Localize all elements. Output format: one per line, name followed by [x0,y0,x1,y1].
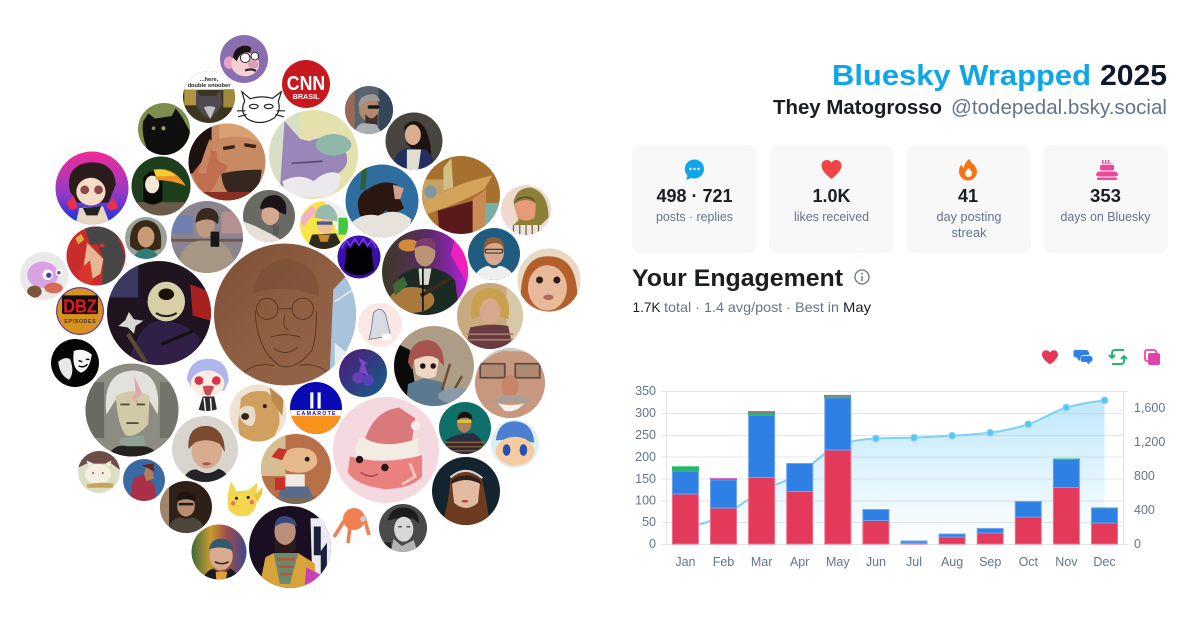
avatar: line drawing cat [237,92,285,123]
avatar: black cat [138,103,190,155]
avatar: older man with mustache and glasses [475,348,545,418]
avatar: man in beanie with rainbow wall [192,524,246,580]
avatar: CNN Brasil logo: BRASIL [293,92,320,101]
stacked bars: quotes [710,395,851,480]
avatar: black and white portrait with hands [379,504,427,552]
icon: replies bubbles [1074,350,1092,364]
avatar: singer with guitar [382,229,468,315]
right axis labels: 400 [1134,503,1155,517]
month labels: Nov [1055,555,1078,569]
month labels: Oct [1019,555,1039,569]
month labels: Feb [713,555,734,569]
right axis labels: 1,200 [1134,435,1165,449]
icon: birthday cake [1096,160,1118,180]
avatar: toucan [132,156,190,216]
avatar: anime pilot on pride flag [300,201,348,249]
avatar: chibi with blue helmet [491,420,539,468]
avatar: long blonde hair in motion [422,156,500,234]
avatar: man with yellow glasses on teal [439,402,491,454]
avatar: smiling curly woman [125,217,167,259]
avatar: bearded man with hand [188,124,266,202]
left axis labels [635,384,656,551]
avatar: orange robot [334,508,369,543]
stat value: 498 · 721 [656,186,732,206]
title: Bluesky Wrapped [832,60,1091,92]
left axis labels: 300 [635,406,656,420]
stat label: days on Bluesky [1060,210,1151,224]
avatar: white cat illustration [78,451,120,493]
panel: posts and replies [632,145,757,253]
display name and handle [773,97,1167,119]
right axis labels [1134,401,1165,551]
left axis labels: 100 [635,494,656,508]
avatar: Jack Skellington figure [107,261,211,365]
cumulative points [872,397,1108,442]
avatar: purple cherries [339,349,387,397]
month labels [675,555,1116,569]
avatar: DBZ episodes logo [56,287,104,335]
left axis labels: 150 [635,472,656,486]
avatar: dark haired selfie [243,190,295,242]
stacked bars: replies [672,398,1118,543]
right axis labels: 0 [1134,537,1141,551]
avatar: cat meme with caption: double snoober [188,83,231,89]
icon: reposts arrows [1109,350,1127,364]
avatar: golden retriever [230,384,286,442]
stat label: day posting [936,210,1002,224]
stat label: streak [952,226,987,240]
stat label [936,210,1002,240]
avatar: comic drummer [394,326,478,406]
left axis labels: 200 [635,450,656,464]
month labels: Jun [866,555,886,569]
month labels: Dec [1093,555,1116,569]
icon: likes heart [1042,350,1058,364]
avatar: pink pixel slime with Santa hat [333,397,439,503]
icon: quotes squares [1145,350,1160,365]
avatar: CNN Brasil logo [282,60,330,108]
avatar: DBZ episodes logo: EPISODES [64,319,96,325]
left axis labels: 250 [635,428,656,442]
month labels: Apr [790,555,809,569]
avatar: cat meme with caption [183,71,235,123]
avatar: cartoon woman with hijab [501,185,551,236]
stat value: 1.0K [812,186,850,206]
month labels: Aug [941,555,963,569]
avatar: Camarote logo: CAMAROTE [297,411,336,417]
month labels: Jul [906,555,922,569]
left axis labels: 50 [642,515,656,529]
engagement summary: May [843,299,871,315]
avatar: person with curly blonde hair [457,283,523,349]
panel: days on Bluesky [1043,145,1168,253]
avatar: cat meme with caption: ...here, [200,77,219,83]
avatar: pink blob creature [20,252,68,300]
icon: chat bubble [685,159,704,180]
avatar: Camarote logo [290,382,342,434]
avatar: pikachu [228,481,263,516]
stat value: 41 [958,186,978,206]
avatar: man in sunglasses [345,86,393,134]
avatar: man with glasses on blue [468,228,520,280]
avatar: porcelain doll with red hair [518,248,580,312]
display name and handle: They Matogrosso [773,97,942,119]
avatar bubble cluster [20,35,580,588]
avatar: man in glasses with hoodie [160,481,212,533]
section heading: Your Engagement: Your Engagement [632,265,843,292]
left axis labels: 350 [635,384,656,398]
right axis labels: 1,600 [1134,401,1165,415]
month labels: May [826,555,850,569]
avatar: woman in red dress illustration [66,226,126,286]
stat label: posts · replies [656,210,733,224]
left axis labels: 0 [649,537,656,551]
icon: flame [959,159,977,180]
display name and handle: @todepedal.bsky.social [951,97,1167,119]
avatar: anime girl with blue hair [186,358,229,411]
avatar: CNN Brasil logo: CNN [287,73,325,95]
chart legend icons [1042,350,1160,365]
icon: heart [822,160,842,179]
stat label: likes received [794,210,869,224]
avatar: curly haired woman against blue sky [346,164,418,238]
avatar: black and white theatre masks [51,339,99,387]
avatar: mirror selfie man [171,201,243,273]
avatar: smiling woman in blazer [386,112,442,170]
stacked bars: likes [672,450,1118,544]
panel: likes received [769,145,894,253]
chart: monthly engagement stacked bars with cumulative line [635,384,1165,569]
cumulative area [685,400,1104,544]
month labels: Mar [751,555,772,569]
chart gridlines and axes [661,391,1128,544]
month labels: Jan [675,555,696,569]
avatar: soft pink sketch [358,303,402,347]
avatar: Monica comic character [261,434,331,506]
avatar: woman with headband at night [432,457,500,525]
avatar: DBZ episodes logo: DBZ [63,295,97,316]
avatar: red coated man on blue [123,459,165,501]
month labels: Sep [979,555,1001,569]
avatar: purple outlined dark figure [338,236,380,278]
avatar: large wood burned portrait [214,244,360,389]
avatar: Bowie style watercolor portrait [86,364,178,459]
avatar: purple cartoon with glasses [220,35,268,83]
right axis labels: 800 [1134,469,1155,483]
avatar: purple dragon illustration [269,110,358,199]
avatar: anime character with dark hair on pink gradient [56,152,128,224]
panel: day posting streak [906,145,1031,253]
engagement summary: total · 1.4 avg/post · Best in [664,299,839,315]
cumulative line [685,400,1104,529]
stat value: 353 [1090,186,1121,206]
avatar: bearded man with scarf [249,506,331,588]
avatar: young person with short hair [172,416,238,482]
stacked bars: reposts [672,396,1118,508]
engagement summary: 1.7K [632,299,661,315]
title: 2025 [1100,60,1167,92]
icon: info [855,270,869,284]
